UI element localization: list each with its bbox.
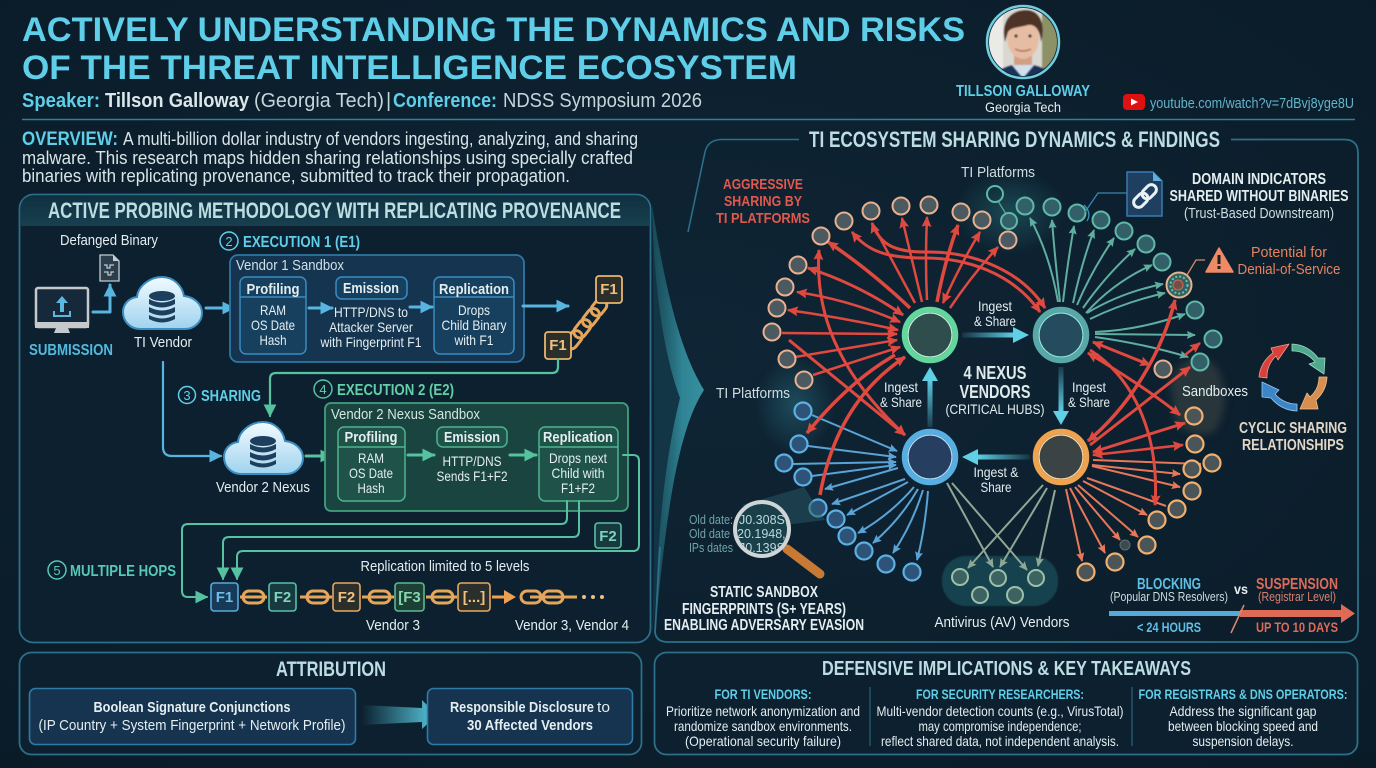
box: boolean signatures [30, 688, 356, 744]
arrow: vendor to vendor 2 [163, 362, 221, 456]
subtitle: speaker and conference: Tillson Galloway [105, 90, 250, 112]
label: vendor 2 nexus: Vendor 2 Nexus [216, 479, 310, 496]
heading: DEFENSIVE IMPLICATIONS & KEY TAKEAWAYS [822, 658, 1191, 680]
callout: aggressive sharing: AGGRESSIVE [723, 176, 803, 193]
provenance chain: F2 [274, 589, 291, 606]
step 5 label [48, 561, 176, 580]
provenance chain: [...] [463, 589, 485, 606]
box: replication: Replication [543, 429, 613, 446]
icon: magnifier with fingerprints: IPs dates [689, 541, 733, 555]
teal arrows [1030, 218, 1195, 357]
label: vendor 3: Vendor 3 [366, 617, 420, 634]
label: vendor 3 and 4: Vendor 3, Vendor 4 [515, 617, 629, 634]
label: cyclic sharing: RELATIONSHIPS [1242, 437, 1344, 454]
callout: static sandbox fingerprints: STATIC SANDBOX [710, 584, 819, 601]
icon: vendor 2 cloud [224, 422, 303, 474]
box: emission: with Fingerprint F1 [320, 334, 422, 350]
tag: F2: F2 [599, 528, 617, 545]
box: replication: Child with [552, 465, 604, 481]
column: registrars and DNS operators [1138, 687, 1348, 749]
icon: computer monitor [35, 288, 89, 333]
step 4 label: EXECUTION 2 (E2) [337, 382, 454, 399]
faded node [1120, 540, 1130, 550]
tag: F2 [595, 523, 621, 548]
group labels: Antivirus (AV) Vendors [934, 614, 1070, 631]
step 2 label [220, 232, 360, 251]
box: emission: Attacker Server [329, 319, 413, 335]
labels: ingest and share: Ingest [884, 379, 918, 395]
column: security researchers: FOR SECURITY RESEARCHERS: [916, 687, 1084, 702]
callout: denial of service [1238, 244, 1340, 278]
arrow [408, 454, 434, 456]
arrow [309, 306, 332, 310]
icon: TI vendor cloud [123, 277, 202, 329]
icon: domain link document [1084, 172, 1162, 221]
callout: static sandbox fingerprints [664, 584, 864, 634]
center label: 4 nexus vendors [946, 363, 1044, 417]
overview text: A multi-billion dollar industry of vendors ingesting, analyzing, and sharing [123, 129, 638, 149]
blocking vs suspension comparison: (Registrar Level) [1258, 589, 1336, 604]
box: emission: HTTP/DNS [442, 453, 502, 469]
group labels: TI Platforms [716, 385, 790, 402]
box: disclosure: to [597, 699, 610, 716]
box: vendor 1 sandbox: Vendor 1 Sandbox [236, 257, 344, 274]
box: boolean signatures: (IP Country + System Fingerprint + Network Profile) [38, 717, 346, 734]
callout: denial of service: Denial-of-Service [1238, 261, 1340, 278]
box: profiling: Hash [358, 480, 384, 496]
overview text: OVERVIEW: [22, 129, 118, 150]
labels: ingest and share: & Share [880, 394, 922, 410]
icon: magnifier with fingerprints: Old date [689, 527, 730, 541]
step 2 label: EXECUTION 1 (E1) [243, 234, 360, 251]
callout: aggressive sharing: TI PLATFORMS [716, 210, 810, 227]
box: profiling: Profiling [246, 281, 300, 298]
column: security researchers: reflect shared data, not independent analysis. [881, 733, 1119, 749]
nodes: blue group [776, 402, 920, 580]
box: disclosure: Responsible Disclosure [450, 699, 594, 716]
icon: magnifier with fingerprints [689, 487, 825, 574]
icon: magnifier with fingerprints: J0.308S, [739, 513, 788, 527]
subtitle: speaker and conference: Conference: [393, 90, 497, 112]
box: emission: Emission [343, 280, 399, 297]
blocking vs suspension comparison [1109, 576, 1355, 635]
glow regions [755, 170, 1225, 606]
box: boolean signatures: Boolean Signature Conjunctions [94, 699, 290, 716]
icon: F1 chain: F1 [600, 281, 618, 298]
column: registrars and DNS operators: between blocking speed and [1168, 718, 1318, 734]
nodes: TI platforms (peach) [764, 196, 1172, 388]
multi-hop connectors [182, 455, 639, 597]
nodes: AV vendors [952, 569, 1044, 603]
node: denial of service target [1166, 272, 1192, 298]
column: security researchers: Multi-vendor detection counts (e.g., VirusTotal) [876, 703, 1124, 719]
box: replication: Replication [439, 281, 509, 298]
labels: ingest and share: & Share [974, 313, 1016, 329]
panel: defensive implications [654, 652, 1358, 754]
hub: green nexus vendor [904, 310, 956, 360]
arrow: vendor to sandbox [206, 306, 234, 310]
box: replication: with F1 [454, 332, 494, 348]
arrow [362, 700, 437, 729]
speaker name: Georgia Tech [985, 99, 1061, 115]
panel: attribution [20, 652, 642, 754]
center label: 4 nexus vendors: VENDORS [960, 382, 1030, 402]
group labels [716, 164, 1248, 631]
connector chevron [652, 205, 704, 640]
box: profiling: RAM [358, 450, 384, 466]
speaker photo [985, 4, 1062, 82]
panel heading: ACTIVE PROBING METHODOLOGY WITH REPLICATING PROVENANCE [48, 198, 621, 223]
blue arrows [793, 415, 928, 560]
label: TI vendor: TI Vendor [134, 334, 192, 351]
provenance chain: [F3 [398, 589, 421, 606]
box: profiling: OS Date [349, 465, 393, 481]
icon: magnifier with fingerprints: J0.139S [739, 541, 785, 555]
nodes: sandboxes (orange) [1078, 408, 1220, 580]
box: profiling [240, 277, 306, 354]
box: emission: Emission [444, 429, 500, 446]
column: registrars and DNS operators: Address the significant gap [1170, 703, 1317, 719]
provenance chain [211, 583, 604, 611]
step 5 label: 5 [53, 563, 61, 578]
box: profiling: Hash [260, 332, 286, 348]
box: replication: Drops [458, 302, 490, 318]
box: emission [320, 277, 422, 350]
box: replication [539, 427, 618, 501]
box: profiling: OS Date [251, 317, 295, 333]
title: ACTIVELY UNDERSTANDING THE DYNAMICS AND RISKS [22, 11, 965, 49]
group labels: Sandboxes [1182, 383, 1248, 400]
center label: 4 nexus vendors: (CRITICAL HUBS) [946, 401, 1044, 417]
icon: cycle arrows [1259, 344, 1327, 411]
label: replication limit: Replication limited to 5 levels [360, 558, 530, 575]
step 4 label: 4 [319, 382, 327, 397]
blocking vs suspension comparison: (Popular DNS Resolvers) [1110, 589, 1228, 604]
red arrows [782, 217, 1200, 505]
overview text [22, 129, 638, 186]
icon: warning [1187, 248, 1233, 275]
box: profiling: RAM [260, 302, 286, 318]
labels: ingest and share: Ingest [978, 298, 1012, 314]
heading: ATTRIBUTION [276, 658, 386, 681]
speaker name [956, 83, 1090, 115]
labels: ingest and share: Ingest & [974, 464, 1019, 480]
callout: static sandbox fingerprints: ENABLING ADVERSARY EVASION [664, 617, 864, 634]
group labels: TI Platforms [961, 164, 1035, 181]
column: TI vendors [666, 687, 860, 749]
box: replication: Child Binary [442, 317, 506, 333]
box: replication: Drops next [549, 450, 607, 466]
blocking vs suspension comparison: BLOCKING [1137, 576, 1201, 593]
column: TI vendors: (Operational security failure) [685, 733, 841, 749]
orange arrows [1066, 460, 1201, 561]
box: emission [436, 427, 508, 484]
callout: denial of service: Potential for [1251, 244, 1327, 261]
AV arrows [947, 483, 1055, 570]
box: vendor 1 sandbox [230, 255, 524, 362]
subtitle: speaker and conference [22, 90, 702, 112]
arrow: monitor to binary [93, 285, 110, 312]
box: profiling: Profiling [344, 429, 398, 446]
panel: methodology [20, 194, 650, 642]
labels: ingest and share: Share [980, 479, 1012, 495]
blocking vs suspension comparison: SUSPENSION [1256, 576, 1338, 593]
step 3 label: 3 [183, 388, 191, 403]
label: defanged binary: Defanged Binary [60, 232, 158, 249]
callout: domain indicators: DOMAIN INDICATORS [1192, 171, 1326, 188]
column: security researchers: may compromise independence; [918, 718, 1082, 734]
box: profiling [338, 427, 405, 501]
overview text: malware. This research maps hidden sharing relationships using specially crafted [22, 148, 633, 168]
cyan hub arrows [922, 327, 1069, 465]
hub: blue nexus vendor [904, 432, 956, 482]
box: disclosure: 30 Affected Vendors [467, 717, 593, 734]
icon: binary document [100, 255, 119, 281]
hub: teal nexus vendor [1036, 310, 1086, 360]
step 4 label [314, 380, 454, 399]
step 3 label: SHARING [201, 388, 261, 405]
arrow [410, 306, 432, 308]
label: cyclic sharing [1239, 420, 1347, 454]
title: OF THE THREAT INTELLIGENCE ECOSYSTEM [22, 49, 797, 87]
labels: ingest and share [880, 298, 1110, 495]
label: cyclic sharing: CYCLIC SHARING [1239, 420, 1347, 437]
speaker name: TILLSON GALLOWAY [956, 83, 1090, 100]
nodes: TI platforms (teal) [987, 186, 1222, 370]
callout: static sandbox fingerprints: FINGERPRINTS (S+ YEARS) [682, 601, 846, 618]
callout: aggressive sharing [716, 176, 810, 227]
column: TI vendors: randomize sandbox environments. [674, 718, 852, 734]
step 2 label: 2 [225, 234, 233, 249]
callout: aggressive sharing: SHARING BY [724, 193, 802, 210]
arrow: sandbox to chain [523, 304, 568, 308]
arrow: chain to vendor 2 [270, 359, 558, 416]
blocking vs suspension comparison: < 24 HOURS [1137, 619, 1201, 635]
callout: domain indicators [1170, 171, 1348, 222]
arrow [306, 454, 332, 458]
step 3 label [178, 386, 261, 405]
box: emission: Sends F1+F2 [436, 468, 508, 484]
provenance chain: F2 [338, 589, 355, 606]
subtitle: speaker and conference: (Georgia Tech) [254, 90, 384, 112]
panel: ecosystem [655, 127, 1358, 642]
heading: TI ECOSYSTEM SHARING DYNAMICS & FINDINGS [809, 127, 1220, 152]
blocking vs suspension comparison: UP TO 10 DAYS [1256, 619, 1338, 635]
icon: magnifier with fingerprints: 20.1948, [737, 527, 786, 541]
box: emission: HTTP/DNS to [334, 304, 408, 320]
subtitle: speaker and conference: NDSS Symposium 2026 [503, 90, 702, 112]
title [22, 11, 965, 87]
icon: magnifier with fingerprints: Old date: [689, 513, 733, 527]
subtitle: speaker and conference: Speaker: [22, 90, 100, 112]
label: submission: SUBMISSION [29, 342, 113, 359]
column: security researchers [876, 687, 1124, 749]
subtitle: speaker and conference: | [386, 90, 391, 112]
blocking vs suspension comparison: vs [1234, 581, 1248, 597]
box: vendor 2 nexus sandbox [325, 403, 628, 511]
icon: F1 chain: F1 [549, 337, 567, 354]
arrow [510, 454, 536, 456]
box: disclosure [428, 688, 632, 744]
hub: orange nexus vendor [1036, 432, 1086, 482]
box: replication: F1+F2 [561, 480, 595, 496]
labels: ingest and share: & Share [1068, 394, 1110, 410]
step 5 label: MULTIPLE HOPS [70, 563, 176, 580]
icon: F1 chain [545, 276, 622, 359]
overview text: binaries with replicating provenance, submitted to track their propagation. [22, 166, 570, 186]
center label: 4 nexus vendors: 4 NEXUS [964, 363, 1026, 383]
box: vendor 2 nexus sandbox: Vendor 2 Nexus Sandbox [331, 406, 480, 423]
column: TI vendors: FOR TI VENDORS: [714, 687, 812, 702]
callout: domain indicators: (Trust-Based Downstream) [1184, 205, 1334, 222]
provenance chain: F1 [216, 589, 233, 606]
column: TI vendors: Prioritize network anonymization and [666, 703, 860, 719]
labels: ingest and share: Ingest [1072, 379, 1106, 395]
box: replication [434, 277, 514, 354]
column: registrars and DNS operators: suspension delays. [1192, 733, 1294, 749]
